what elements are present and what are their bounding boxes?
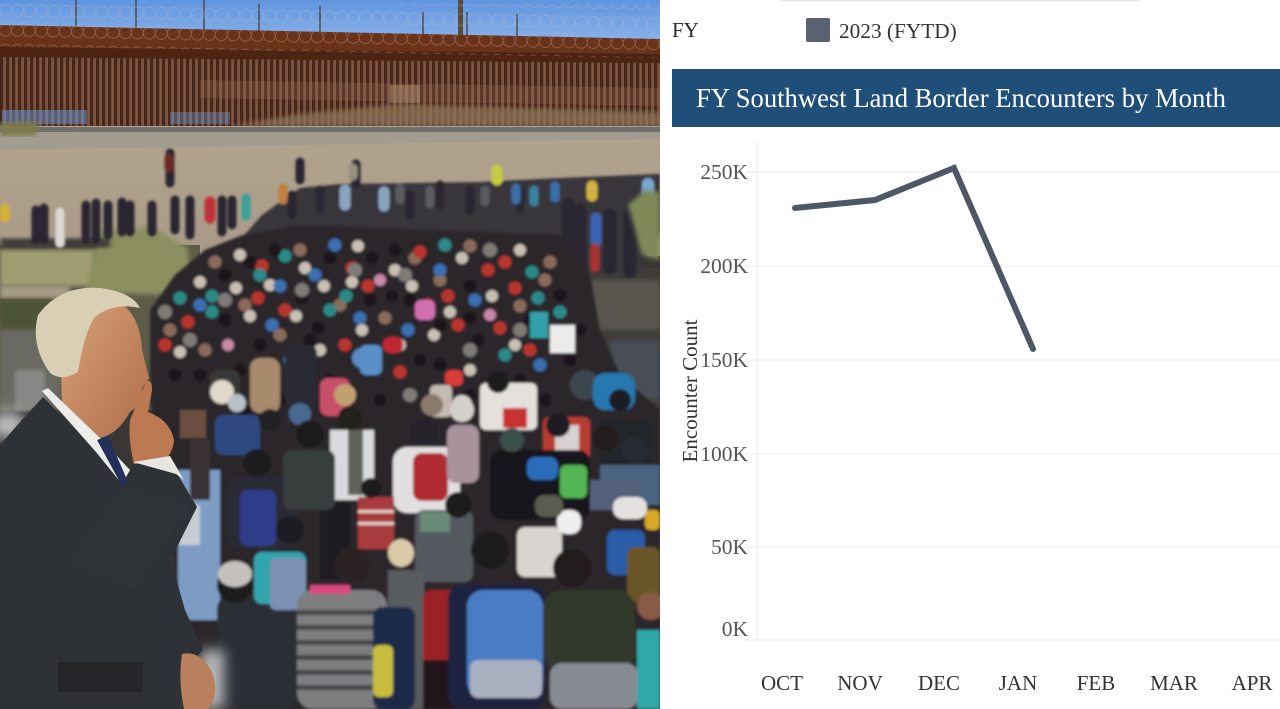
suit jacket bbox=[0, 397, 203, 709]
y axis labels: 200K bbox=[700, 254, 748, 278]
y axis labels bbox=[700, 160, 748, 641]
neck and face bbox=[60, 298, 149, 445]
title banner: FY Southwest Land Border Encounters by Month bbox=[696, 83, 1226, 113]
plaid shirt person with backpack and hat bbox=[388, 492, 473, 582]
person with purple backpack bbox=[228, 449, 298, 549]
lower hand bbox=[180, 653, 215, 709]
x axis labels: NOV bbox=[837, 671, 883, 695]
dark mass with blue and green packs bbox=[490, 428, 590, 520]
necktie bbox=[97, 436, 128, 486]
x axis labels: OCT bbox=[761, 671, 803, 695]
y axis labels: 150K bbox=[700, 348, 748, 372]
x axis labels: JAN bbox=[999, 671, 1037, 695]
y axis labels: 250K bbox=[700, 160, 748, 184]
white shirt person with red backpack bbox=[393, 418, 460, 513]
raised finger and fist bbox=[130, 381, 174, 464]
grey-pink backpack bbox=[447, 398, 479, 483]
data line bbox=[795, 168, 1033, 349]
border fence with razor wire bbox=[0, 25, 660, 127]
x axis labels: APR bbox=[1232, 671, 1272, 695]
river bank with shrubs bbox=[0, 226, 200, 410]
y axis labels: 50K bbox=[711, 535, 748, 559]
x axis labels bbox=[761, 671, 1272, 695]
legend: 2023 (FYTD) bbox=[839, 19, 957, 43]
y axis labels: 100K bbox=[700, 442, 748, 466]
cutout figure: man making shush gesture bbox=[0, 288, 215, 709]
red striped tee child bbox=[358, 478, 394, 549]
top edge rule bbox=[780, 0, 1140, 1]
foreground figures bbox=[217, 516, 665, 709]
sky and wire posts bbox=[0, 0, 660, 45]
crowd on embankment bbox=[0, 153, 660, 272]
line chart bbox=[678, 142, 1280, 695]
shirt cuff bbox=[133, 456, 184, 480]
blurred white halo around cutout figure bbox=[0, 411, 224, 709]
panel: photo collage of border crowd bbox=[0, 0, 660, 709]
base ground bbox=[0, 0, 660, 709]
legend: FY bbox=[672, 18, 699, 42]
jacket pocket bbox=[58, 662, 143, 692]
middle crowd figures bbox=[180, 300, 660, 510]
x axis labels: MAR bbox=[1150, 671, 1198, 695]
distant crowd dots bbox=[165, 245, 580, 410]
dark backpack figure bbox=[283, 420, 335, 510]
road bbox=[388, 570, 426, 709]
y axis labels: 0K bbox=[722, 617, 748, 641]
hair bbox=[36, 288, 140, 377]
concrete embankment with guard rail bbox=[0, 122, 660, 256]
panel: chart area bbox=[672, 0, 1280, 695]
legend bbox=[672, 18, 957, 43]
blue-grey figure behind raised hand bbox=[178, 440, 220, 620]
y axis title: Encounter Count bbox=[678, 319, 702, 462]
shrub at right of crowd bbox=[628, 190, 660, 260]
river water bbox=[555, 268, 660, 438]
white cap figures bbox=[517, 495, 660, 602]
x axis labels: FEB bbox=[1077, 671, 1115, 695]
main crowd bbox=[150, 225, 665, 709]
x axis labels: DEC bbox=[918, 671, 960, 695]
shirt collar bbox=[42, 388, 130, 484]
blurred figure at lower left bbox=[0, 600, 15, 709]
title banner bbox=[672, 69, 1280, 127]
